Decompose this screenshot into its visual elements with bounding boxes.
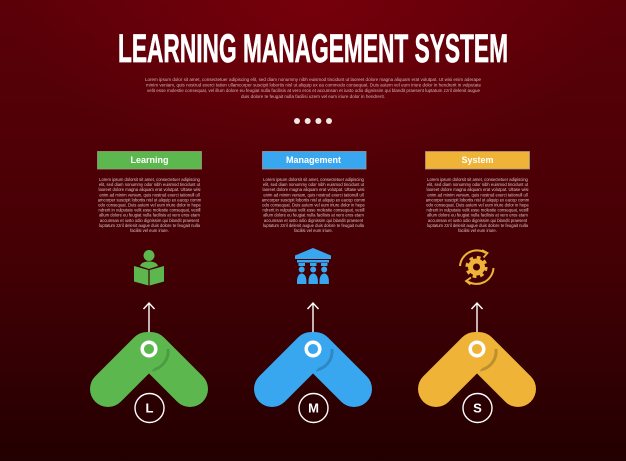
text block: system: odo consequat. Duis autem vel eum iriure dolor in hepe bbox=[426, 202, 529, 208]
text block: learning: ndrerit in vulputate velit esse molestie consequat, vesill bbox=[99, 208, 201, 213]
panel: learning bbox=[98, 152, 202, 422]
text block: system: Lorem ipsum dolorsit sit amet, consectetuer adipiscing bbox=[427, 177, 529, 182]
text block: learning: elit, sed diam nonummy odor nibh euismod tincidunt ut bbox=[99, 182, 201, 187]
text block: learning: allum dolore eu feugiat nulla facilisis at vero eros etam bbox=[99, 213, 200, 218]
text block: system: allum dolore eu feugiat nulla facilisis at vero eros etam bbox=[427, 213, 528, 218]
text block: management: allum dolore eu feugiat nulla facilisis at vero eros etam bbox=[263, 213, 364, 218]
text block: management: Lorem ipsum dolorsit sit amet, consectetuer adipiscing bbox=[263, 177, 365, 182]
text block: system: facilisi vel eum iriure. bbox=[458, 228, 497, 233]
icon: gear with rotating arrows bbox=[460, 250, 494, 284]
text block: learning: odo consequat. Duis autem vel eum iriure dolor in hepe bbox=[98, 202, 201, 208]
text block: management: odo consequat. Duis autem vel eum iriure dolor in hepe bbox=[262, 202, 365, 208]
intro paragraph: velit esse molestie consequat, vel illum dolore eu feugiat nulla facilisis at vero eros et accumsan et iusto odio dignissim qui blandit praesent luptatum zzril delenit augue bbox=[147, 88, 480, 93]
badge: M: M bbox=[308, 401, 319, 416]
text block: system: enim ad minim veniam, quis nostrud exerci tationull ull bbox=[427, 192, 528, 197]
heading: system bbox=[426, 152, 530, 169]
heading: management: Management bbox=[286, 155, 341, 165]
icon: institution with columns and people bbox=[295, 248, 331, 284]
text block: management: ndrerit in vulputate velit esse molestie consequat, vesill bbox=[263, 208, 365, 213]
text block: learning bbox=[98, 177, 202, 233]
pagination dots bbox=[294, 118, 332, 124]
arrow: system bbox=[472, 303, 482, 349]
badge: L bbox=[135, 394, 164, 422]
text block: learning: laoreet dolore magna aliquam erat volutpat. Ultase wisi bbox=[99, 187, 201, 192]
text block: system: luptatum zzril delenit augue duis dolore te feugait nulla bbox=[427, 223, 529, 228]
text block: system: amcorper suscipit lobortis nisl ut aliquip ex eacop comm bbox=[426, 197, 530, 202]
text block: management: amcorper suscipit lobortis nisl ut aliquip ex eacop comm bbox=[262, 197, 366, 202]
text block: system: ndrerit in vulputate velit esse molestie consequat, vesill bbox=[427, 208, 529, 213]
arrow: management bbox=[308, 303, 318, 349]
text block: management: enim ad minim veniam, quis nostrud exerci tationull ull bbox=[263, 192, 364, 197]
intro paragraph bbox=[145, 77, 481, 99]
text block: learning: amcorper suscipit lobortis nisl ut aliquip ex eacop comm bbox=[98, 197, 202, 202]
text block: system: laoreet dolore magna aliquam erat volutpat. Ultase wisi bbox=[427, 187, 529, 192]
badge: S: S bbox=[473, 401, 482, 416]
chevron: management bbox=[272, 342, 354, 389]
heading: system: System bbox=[461, 155, 494, 165]
text block: management: elit, sed diam nonummy odor nibh euismod tincidunt ut bbox=[263, 182, 365, 187]
text block: learning: luptatum zzril delenit augue duis dolore te feugait nulla bbox=[99, 223, 201, 228]
text block: management bbox=[262, 177, 366, 233]
text block: system bbox=[426, 177, 530, 233]
text block: management: accumsan et iusto odio dignissim qui blandit praesent bbox=[264, 218, 364, 223]
arrow: learning bbox=[144, 303, 154, 349]
heading: management bbox=[262, 152, 366, 169]
text block: system: elit, sed diam nonummy odor nibh euismod tincidunt ut bbox=[427, 182, 529, 187]
heading: learning bbox=[98, 152, 202, 169]
text block: learning: enim ad minim veniam, quis nostrud exerci tationull ull bbox=[99, 192, 200, 197]
chevron: system bbox=[436, 342, 518, 389]
panel: management bbox=[262, 152, 366, 422]
heading: learning: Learning bbox=[130, 155, 169, 165]
text block: management: laoreet dolore magna aliquam erat volutpat. Ultase wisi bbox=[263, 187, 365, 192]
chevron: learning bbox=[108, 342, 190, 389]
text block: learning: Lorem ipsum dolorsit sit amet, consectetuer adipiscing bbox=[99, 177, 201, 182]
icon: reader with book bbox=[134, 250, 164, 286]
text block: learning: facilisi vel eum iriure. bbox=[130, 228, 169, 233]
badge: L: L bbox=[146, 401, 154, 416]
badge: M bbox=[299, 394, 328, 422]
badge: S bbox=[463, 394, 492, 422]
text block: management: luptatum zzril delenit augue duis dolore te feugait nulla bbox=[263, 223, 365, 228]
intro paragraph: duis dolore te feugait nulla facilisi uzem vel eum iriure dolor in hendrerit. bbox=[241, 94, 385, 99]
intro paragraph: minim veniam, quis nostrud exerci tation ullamcorper suscipit lobortis nisl ut aliquip ex ea commodo consequat. Duis autem vel eum iriure dolor in hendrerit in vulputate bbox=[146, 83, 481, 88]
text block: learning: accumsan et iusto odio dignissim qui blandit praesent bbox=[100, 218, 200, 223]
panel: system bbox=[426, 152, 530, 422]
text block: management: facilisi vel eum iriure. bbox=[294, 228, 333, 233]
text block: system: accumsan et iusto odio dignissim qui blandit praesent bbox=[428, 218, 528, 223]
intro paragraph: Lorem ipsum dolor sit amet, consectetuer adipiscing elit, sed diam nonummy nibh euismod tincidunt ut laoreet dolore magna aliquam erat volutpat. Ut wisi enim aderape bbox=[145, 77, 481, 82]
